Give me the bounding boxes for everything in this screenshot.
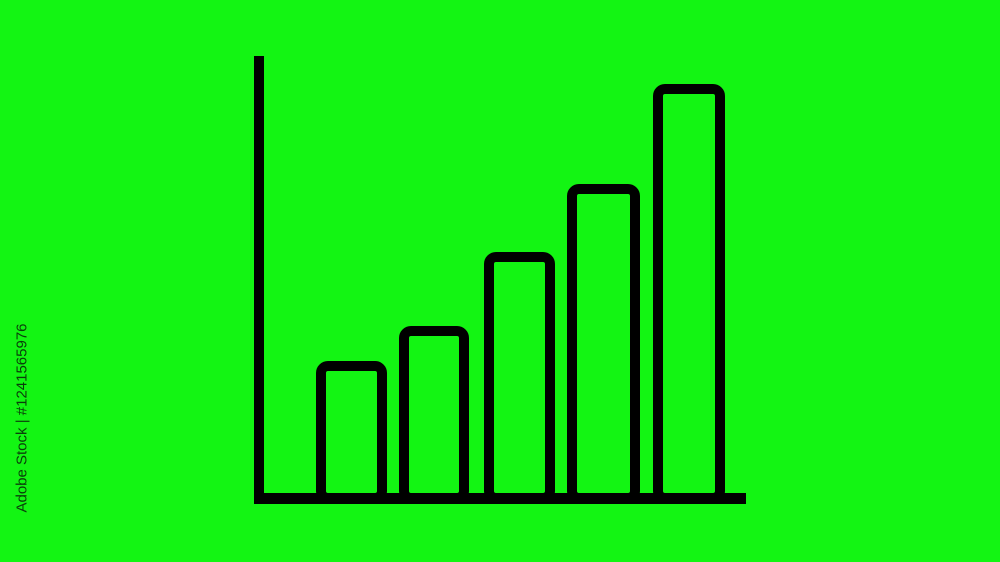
bar 4 xyxy=(572,189,635,498)
x axis xyxy=(254,493,746,504)
bar 1 xyxy=(321,366,382,498)
y axis xyxy=(254,56,264,504)
bar 2 xyxy=(404,331,464,498)
bar 3 xyxy=(489,257,550,498)
credit text: Adobe Stock | #1241565976 xyxy=(14,323,30,513)
bar 5 xyxy=(658,89,720,498)
